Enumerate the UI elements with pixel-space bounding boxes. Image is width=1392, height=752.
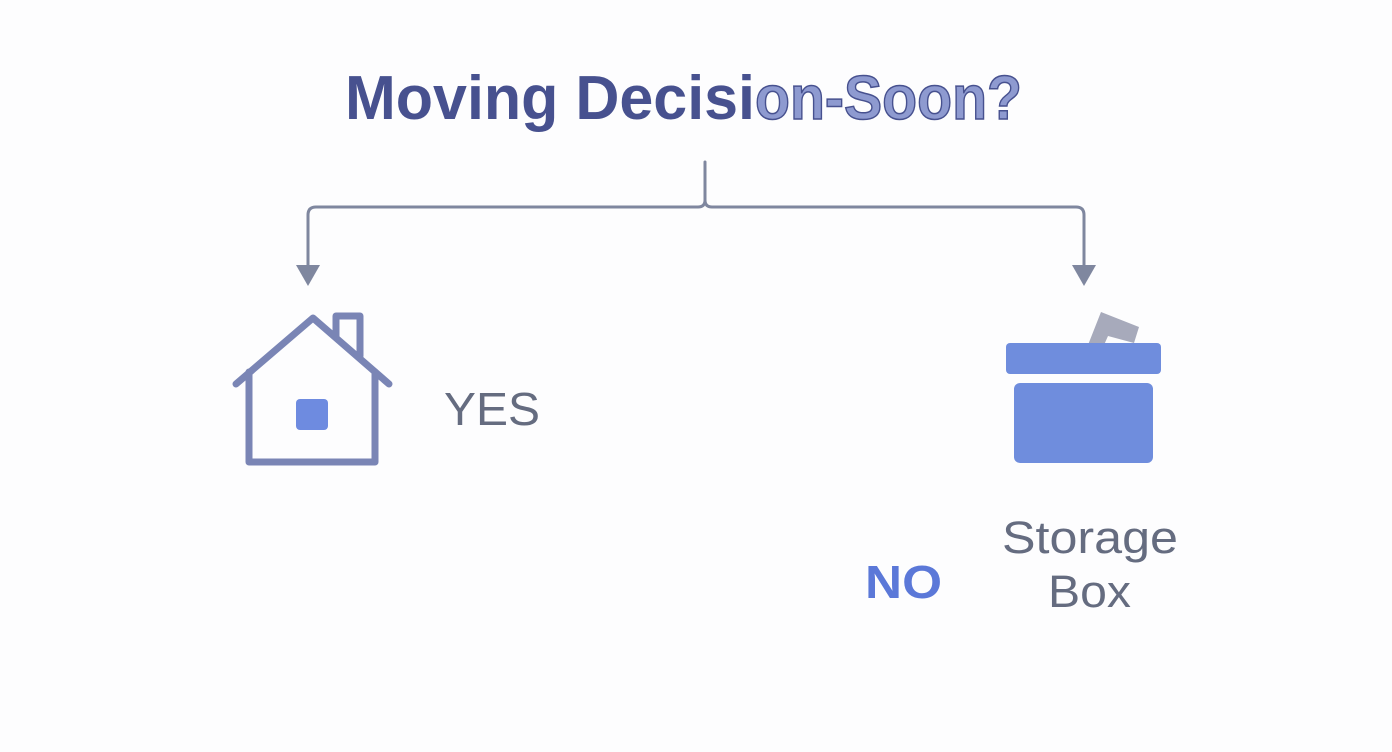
title: Moving Decisi xyxy=(345,64,755,133)
label: Storage Box: Box xyxy=(1048,566,1132,617)
label: Storage Box: Storage xyxy=(1002,512,1178,563)
label: YES: YES xyxy=(444,383,540,435)
label: NO: NO xyxy=(865,556,942,608)
arrow: connector tree xyxy=(296,162,1096,286)
icon: storage box xyxy=(1006,312,1161,463)
title: on-Soon? xyxy=(755,64,1022,133)
label: Storage Box xyxy=(1002,512,1178,617)
title xyxy=(345,64,1022,133)
icon: house xyxy=(236,316,389,462)
